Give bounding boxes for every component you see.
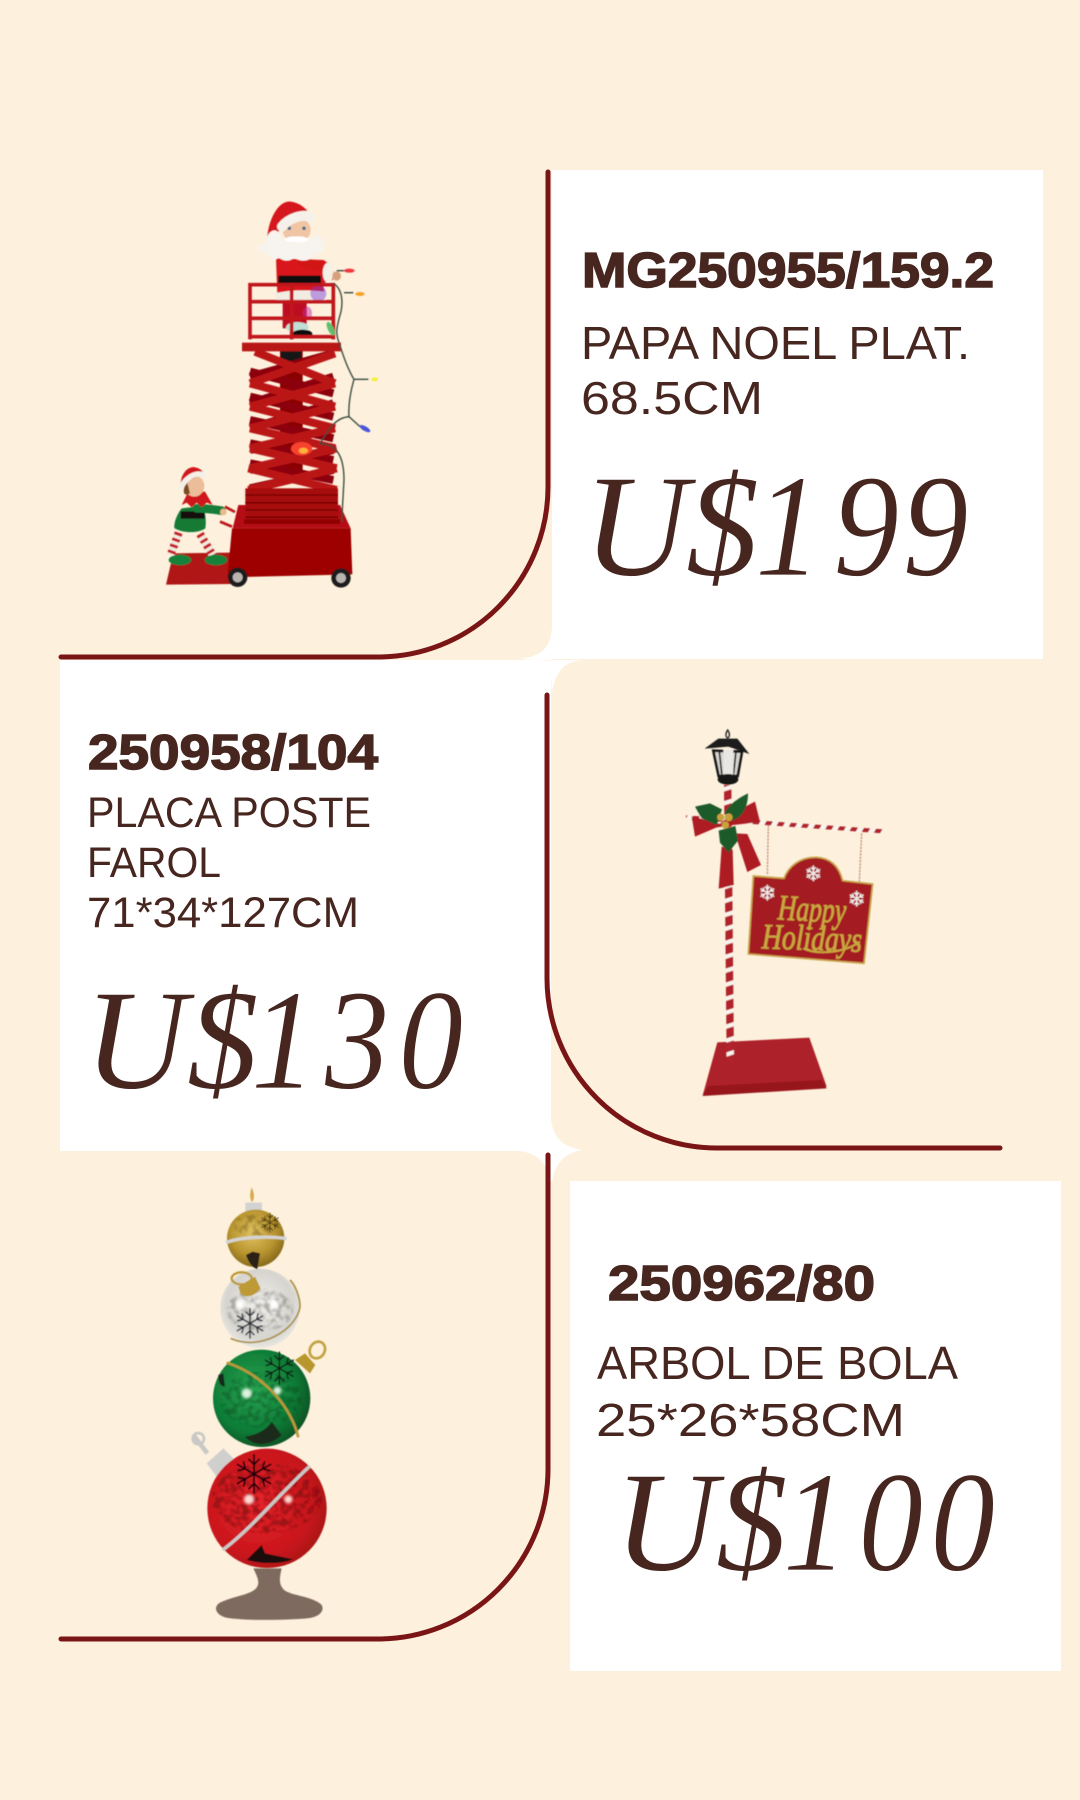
panel 1 white card — [552, 170, 1043, 659]
crossbar — [686, 815, 883, 833]
curved divider line 1 — [61, 172, 548, 657]
price 3: 100 — [783, 1444, 995, 1602]
panel: product 1 details — [552, 170, 1043, 659]
panel 3 white card — [570, 1181, 1061, 1671]
price 3 — [614, 1443, 995, 1602]
striped post — [724, 785, 734, 1063]
hanging sign: Holidays — [761, 916, 863, 960]
platform railing — [242, 285, 341, 351]
green ornament — [213, 1339, 328, 1447]
product code 3: 250962/80 — [608, 1257, 875, 1311]
price 2: 130 — [251, 962, 463, 1120]
panel 2 white card with corner joins — [60, 628, 582, 1181]
description 2: 71*34*127CM — [87, 889, 359, 937]
curved divider line 2 — [547, 695, 1000, 1148]
price 2 — [84, 961, 463, 1120]
gold ornament — [226, 1187, 287, 1269]
elf figure — [169, 467, 235, 565]
description 2 — [87, 789, 371, 937]
lamp base — [703, 1038, 827, 1096]
silver ornament — [220, 1269, 300, 1348]
string of lights — [291, 269, 378, 522]
panel: product 3 details — [570, 1181, 1061, 1671]
description 1: PAPA NOEL PLAT. — [581, 317, 970, 369]
description 3: ARBOL DE BOLA — [597, 1337, 958, 1389]
panel: product 2 details — [60, 628, 582, 1181]
scissor lift — [244, 349, 340, 524]
product image: Santa on scissor lift with elf — [166, 202, 378, 588]
holly leaves and bells — [695, 793, 748, 853]
hanging sign — [748, 857, 873, 963]
price 1: 199 — [755, 446, 968, 608]
description 2: PLACA POSTE — [87, 789, 371, 837]
stand — [216, 1568, 323, 1620]
lantern — [705, 730, 749, 785]
hanging sign: Happy — [776, 887, 847, 931]
bow — [692, 802, 761, 889]
price 1: U$ — [583, 445, 759, 607]
description 2: FAROL — [87, 839, 221, 887]
price 3: U$ — [614, 1443, 788, 1601]
description 3: 25*26*58CM — [596, 1394, 905, 1446]
price 2: U$ — [84, 961, 258, 1119]
red ornament — [193, 1433, 327, 1568]
product code 1: MG250955/159.2 — [582, 244, 994, 298]
hanging chains — [767, 825, 862, 882]
Santa figure — [258, 202, 341, 338]
product image: lamp post with Happy Holidays sign — [686, 730, 883, 1096]
product image: stacked ornaments tree — [193, 1187, 328, 1620]
product code 2: 250958/104 — [88, 726, 378, 780]
description 3 — [596, 1337, 958, 1446]
description 1 — [581, 317, 970, 424]
price 1 — [583, 445, 968, 608]
curved divider line 3 — [61, 1155, 548, 1639]
lift cart base — [166, 505, 352, 588]
description 1: 68.5CM — [581, 372, 763, 424]
